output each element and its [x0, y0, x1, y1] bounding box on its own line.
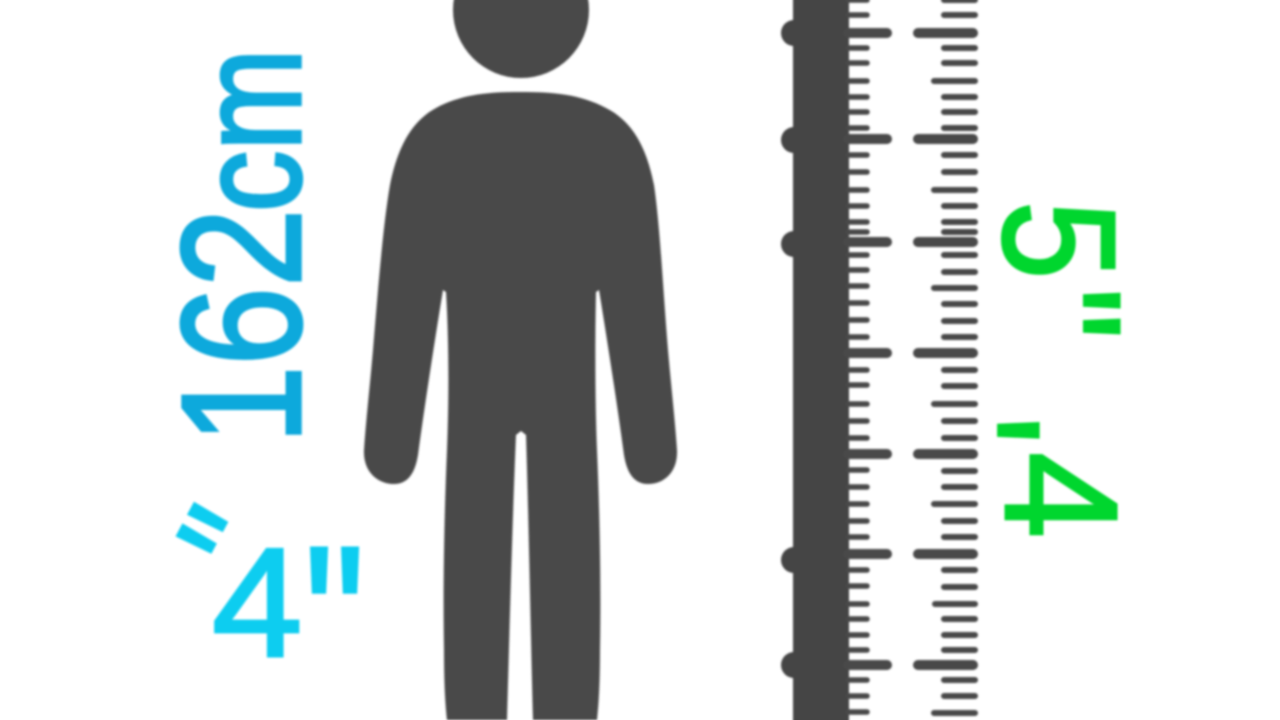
ruler left ticks, minor	[848, 0, 867, 712]
label: height in inches	[142, 481, 365, 720]
ruler	[781, 0, 975, 720]
label: height in centimetres: cm	[168, 49, 331, 212]
head	[453, 0, 589, 78]
ruler bar with knobs	[781, 0, 849, 720]
label: height in feet and inches: 4	[971, 452, 1150, 538]
label: height in inches: 4	[212, 516, 303, 689]
label: height in inches: "	[142, 481, 333, 613]
body	[364, 92, 677, 720]
label: height in feet and inches: 5	[970, 201, 1148, 279]
ruler right ticks, major	[918, 33, 973, 665]
label: height in centimetres: 162	[148, 209, 337, 444]
label: height in feet and inches	[875, 201, 1153, 538]
label: height in feet and inches: "	[974, 288, 1153, 339]
label: height in centimetres	[148, 49, 337, 444]
icon: person silhouette	[364, 0, 677, 720]
ruler left ticks, major	[848, 33, 887, 665]
ruler right ticks, minor	[934, 0, 975, 713]
label: height in feet and inches: '	[875, 416, 1076, 445]
